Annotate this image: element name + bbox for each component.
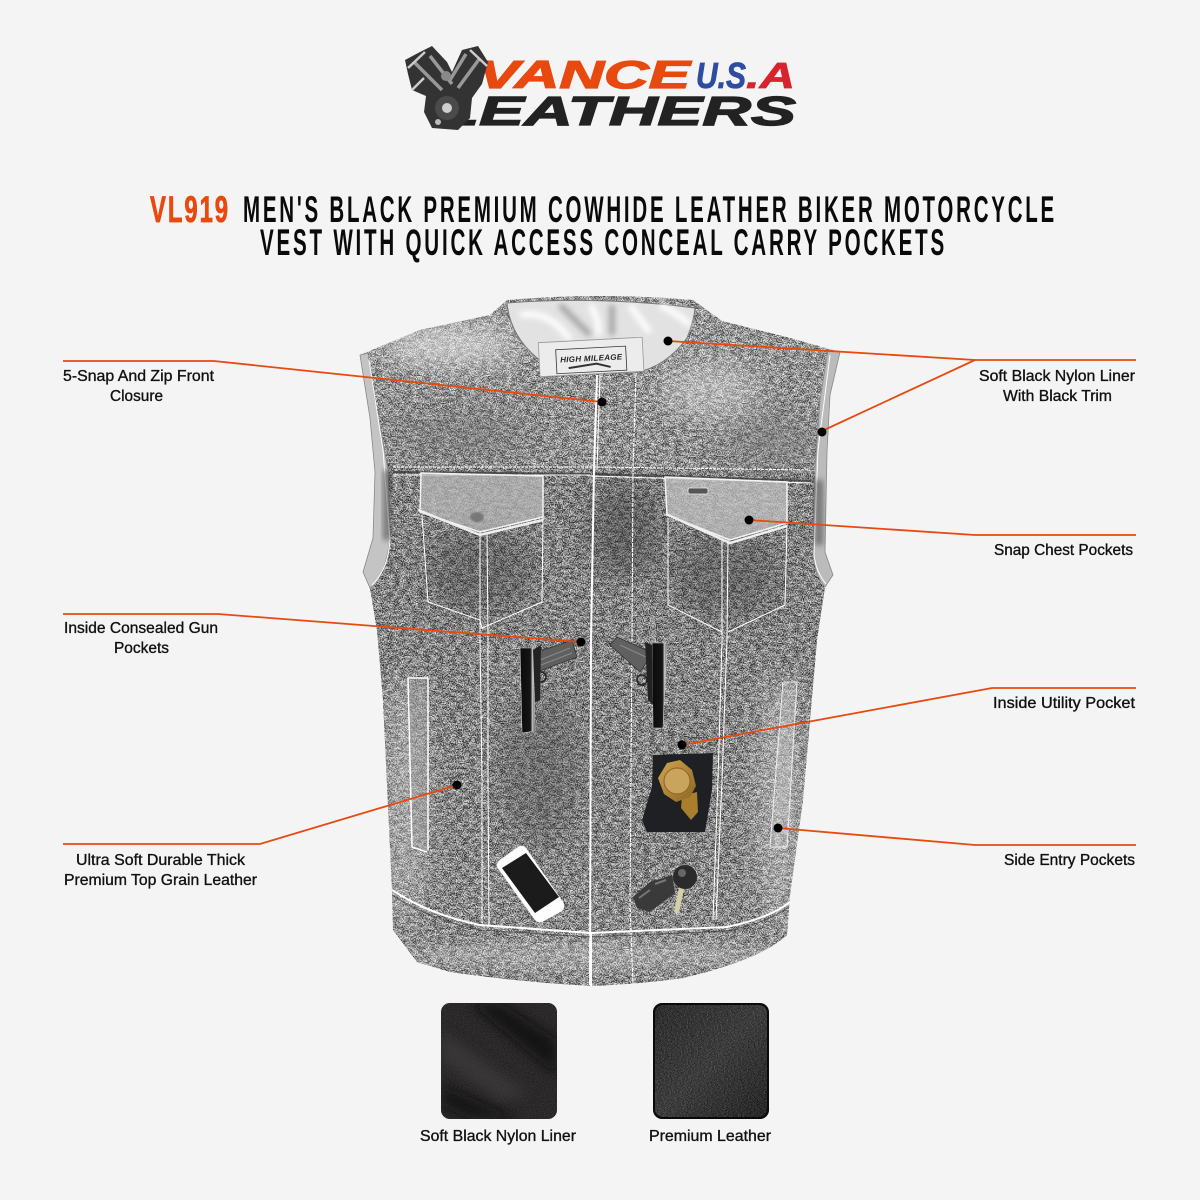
callout: 5-snap and zip front closure: 5-Snap And Zip Front [63, 368, 215, 385]
logo: Vance Leathers USA [405, 46, 796, 134]
swatch label: Soft Black Nylon Liner [420, 1128, 577, 1145]
icon: car key [633, 865, 697, 913]
icon: smartphone [497, 846, 564, 922]
callout: inside concealed gun pockets: Pockets [114, 640, 169, 657]
collar lining [507, 300, 695, 377]
watch case [658, 760, 696, 802]
callout: inside utility pocket: Inside Utility Pocket [993, 695, 1136, 712]
right chest pocket [665, 477, 787, 920]
collar tag: HIGH MILEAGE [560, 352, 623, 365]
callout: inside concealed gun pockets [63, 614, 586, 657]
callout: soft black nylon liner with black trim: With Black Trim [1003, 388, 1112, 405]
swatch: soft black nylon liner [420, 1003, 577, 1145]
left side pocket [407, 678, 428, 852]
logo word LEATHERS: LEATHERS [438, 88, 796, 134]
callout: ultra soft leather [63, 780, 462, 889]
right side pocket [770, 682, 797, 847]
title: product code: VL919 [150, 189, 230, 230]
hem band [392, 890, 790, 986]
callout: 5-snap and zip front closure: Closure [110, 388, 163, 405]
callout: inside utility pocket [678, 688, 1136, 750]
callout: soft black nylon liner with black trim [664, 336, 1136, 436]
callout: 5-snap and zip front closure [63, 361, 606, 406]
left chest pocket [418, 473, 543, 925]
callout: side entry pockets: Side Entry Pockets [1004, 852, 1135, 869]
vest illustration [360, 296, 840, 986]
logo word U.S.A: .A [746, 55, 795, 96]
title [150, 189, 1057, 263]
collar tag [538, 337, 644, 377]
icon: watch in pouch [642, 753, 713, 832]
icon: V-twin engine [405, 46, 488, 130]
watch bracelet [681, 792, 698, 820]
logo word U.S.A: U.S [696, 55, 746, 96]
icon: right pistol [610, 637, 667, 728]
callout: side entry pockets [774, 824, 1136, 869]
vest body [361, 296, 834, 986]
pouch [642, 753, 713, 832]
callout: inside concealed gun pockets: Inside Consealed Gun [64, 620, 218, 637]
icon: left pistol [520, 640, 577, 733]
front placket and yoke seams [393, 373, 810, 985]
swatch: premium leather [649, 1003, 772, 1145]
armhole trims [360, 350, 840, 588]
swatch label: Premium Leather [649, 1128, 772, 1145]
callout: ultra soft leather: Premium Top Grain Leather [64, 872, 258, 889]
logo word U.S.A [696, 55, 795, 96]
callout: soft black nylon liner with black trim: Soft Black Nylon Liner [979, 368, 1136, 385]
logo word VANCE: VANCE [478, 54, 692, 97]
callout: snap chest pockets: Snap Chest Pockets [994, 542, 1133, 559]
callout: snap chest pockets [744, 516, 1136, 559]
callout: ultra soft leather: Ultra Soft Durable Thick [76, 852, 246, 869]
